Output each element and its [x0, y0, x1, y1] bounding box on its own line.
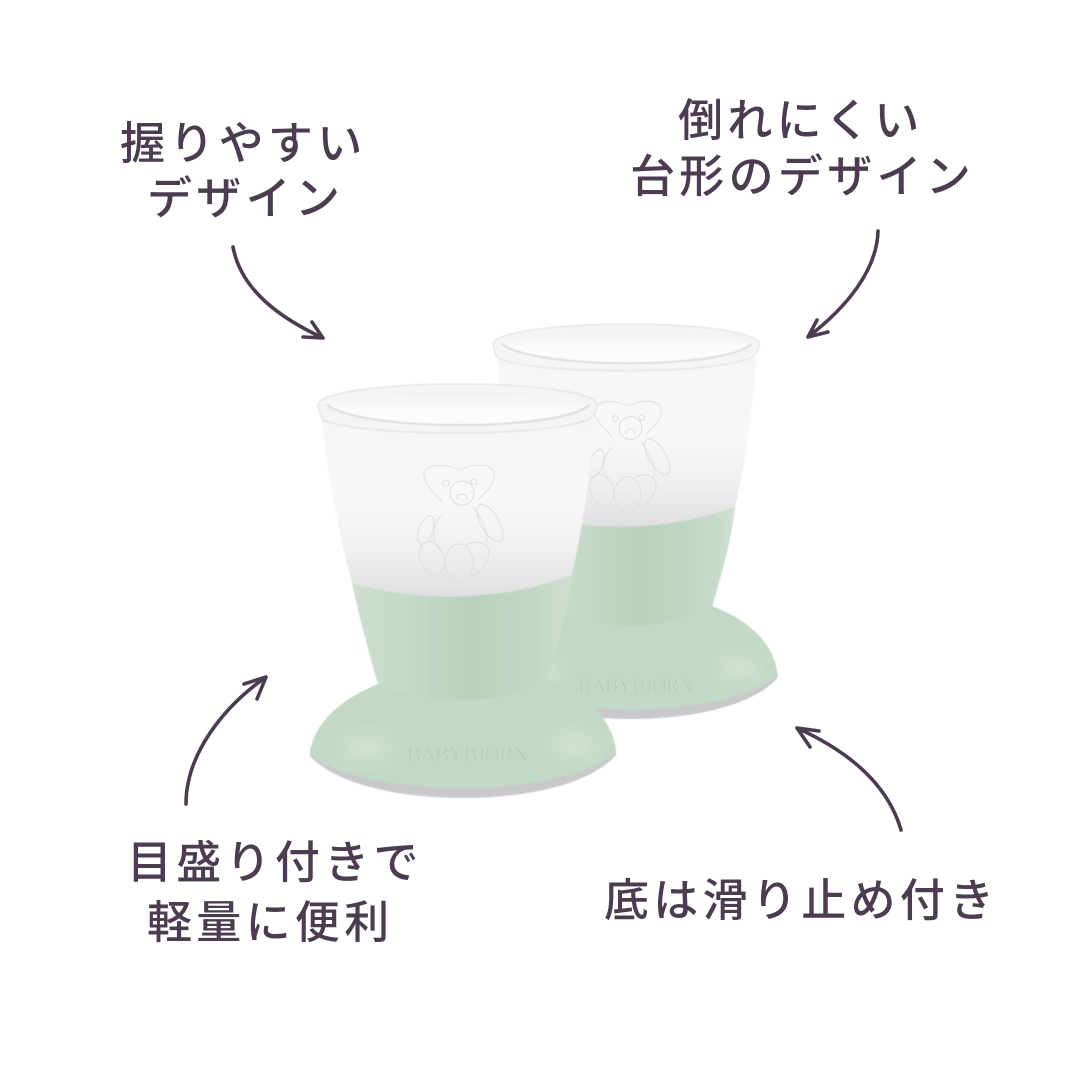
icon: front cup: BABYBJÖRN: [407, 742, 528, 766]
arrow: bottom right: [797, 728, 901, 830]
heading: hard-to-tip trapezoid design: [630, 95, 975, 202]
heading: easy-to-grip design: [120, 118, 367, 224]
arrow: bottom left: [186, 677, 266, 804]
icon: front cup: [310, 384, 616, 798]
heading: hard-to-tip trapezoid design: 台形のデザイン: [630, 151, 975, 202]
heading: easy-to-grip design: 握りやすい: [120, 118, 367, 169]
heading: measuring marks and lightweight: 目盛り付きで: [127, 837, 423, 888]
icon: back cup: [486, 324, 777, 719]
heading: easy-to-grip design: デザイン: [147, 173, 344, 224]
heading: measuring marks and lightweight: 軽量に便利: [147, 897, 394, 948]
icon: back cup: BABYBJÖRN: [578, 673, 693, 696]
heading: measuring marks and lightweight: [127, 837, 423, 948]
heading: hard-to-tip trapezoid design: 倒れにくい: [678, 95, 924, 146]
heading: non-slip bottom: 底は滑り止め付き: [604, 875, 998, 926]
arrow: top right: [808, 231, 878, 337]
arrow: top left: [233, 247, 323, 338]
